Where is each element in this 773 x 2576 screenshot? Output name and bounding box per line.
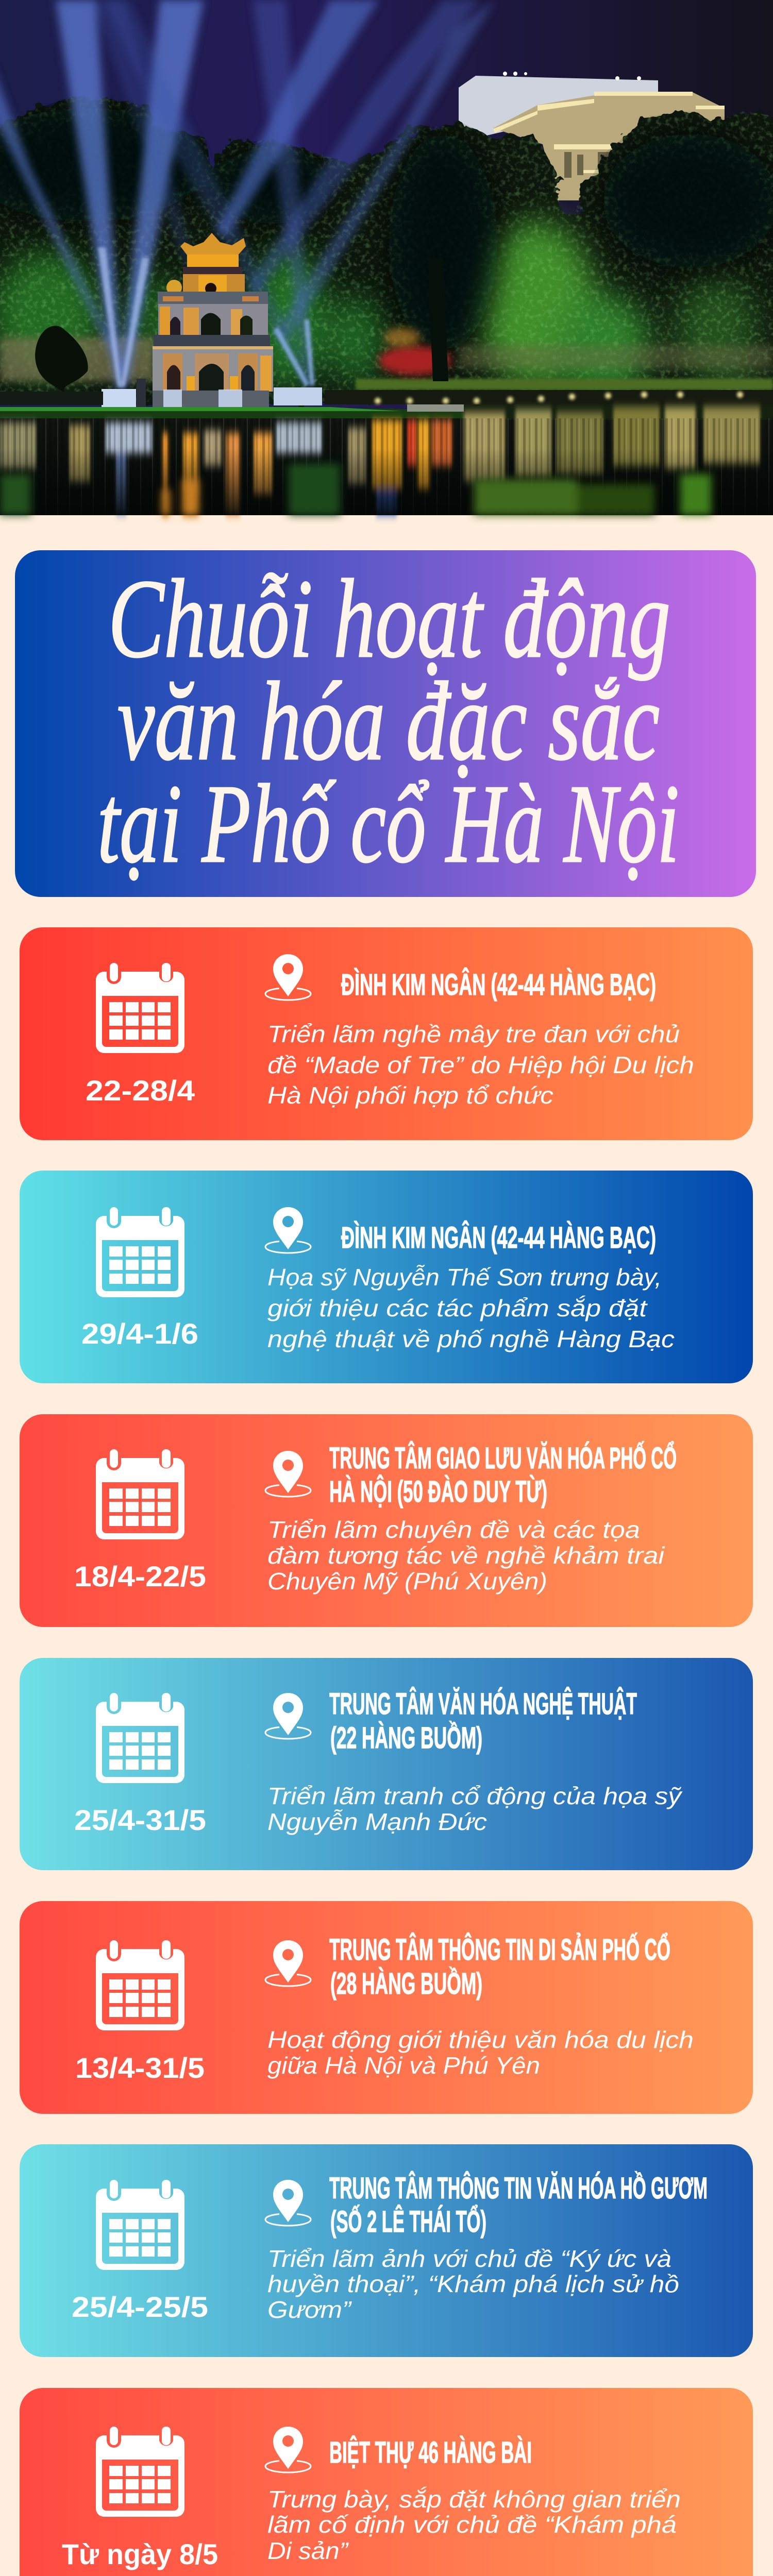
lit foliage glow: [0, 222, 773, 412]
icon: calendar: [96, 963, 184, 1053]
description: Triển lãm nghề mây tre đan với chủ: [267, 1021, 680, 1047]
island shoreline: [0, 404, 468, 421]
description: giữa Hà Nội và Phú Yên: [267, 2052, 540, 2079]
description: Triển lãm tranh cổ động của họa sỹ: [267, 1783, 683, 1809]
date: 25/4-25/5: [72, 2291, 208, 2323]
icon: calendar: [96, 2427, 184, 2517]
description: đàm tương tác về nghề khảm trai: [267, 1542, 665, 1569]
icon: calendar: [96, 1693, 184, 1783]
icon: calendar: [96, 1940, 184, 2030]
venue heading: [329, 1933, 670, 2001]
date: 29/4-1/6: [81, 1317, 198, 1350]
description: [267, 1783, 683, 1835]
description: [267, 2026, 694, 2079]
icon: location pin: [265, 1693, 311, 1739]
description: đề “Made of Tre” do Hiệp hội Du lịch: [267, 1052, 694, 1078]
far bank with lights: [0, 390, 773, 405]
description: [267, 2245, 679, 2323]
description: giới thiệu các tác phẩm sắp đặt: [267, 1295, 648, 1321]
description: [267, 1264, 675, 1352]
description: [267, 2486, 681, 2564]
description: [267, 1021, 694, 1109]
description: Hà Nội phối hợp tổ chức: [267, 1082, 553, 1109]
description: Hoạt động giới thiệu văn hóa du lịch: [267, 2026, 694, 2053]
description: Trưng bày, sắp đặt không gian triển: [267, 2486, 681, 2513]
date: 18/4-22/5: [74, 1560, 206, 1592]
icon: calendar: [96, 1207, 184, 1297]
description: Triển lãm ảnh với chủ đề “Ký ức và: [267, 2245, 671, 2272]
Turtle Tower: [153, 233, 273, 407]
icon: calendar: [96, 2180, 184, 2270]
panel: Trung tâm Thông tin Văn hóa Hồ Gươm, 25/4-25/5: [20, 2144, 753, 2357]
venue heading: (SỐ 2 LÊ THÁI TỔ): [330, 2205, 486, 2239]
tree canopy silhouettes: [0, 98, 773, 402]
description: Gươm”: [267, 2296, 352, 2323]
description: [267, 1516, 665, 1595]
hero photo: Turtle Tower at night: [0, 0, 773, 515]
title: [97, 557, 679, 886]
icon: location pin: [265, 1940, 311, 1986]
venue heading: HÀ NỘI (50 ĐÀO DUY TỪ): [329, 1475, 547, 1509]
description: Triển lãm chuyên đề và các tọa: [267, 1516, 640, 1543]
venue heading: [329, 1442, 677, 1509]
description: Di sản”: [267, 2537, 349, 2564]
venue heading: [329, 1687, 637, 1755]
panel: Biệt thự 46 Hàng Bài, từ ngày 8/5: [20, 2388, 753, 2576]
panel: Đình Kim Ngân, 29/4-1/6: [20, 1171, 753, 1383]
icon: location pin: [265, 2180, 311, 2226]
date: Từ ngày 8/5: [62, 2538, 218, 2570]
description: Chuyên Mỹ (Phú Xuyên): [267, 1568, 547, 1595]
icon: location pin: [265, 2427, 311, 2472]
icon: calendar: [96, 1449, 184, 1539]
leaf texture: [0, 93, 773, 402]
distant plaza and lawn: [0, 258, 773, 392]
panel: Đình Kim Ngân, 22-28/4: [20, 927, 753, 1140]
panel: Trung tâm Văn hóa Nghệ thuật, 25/4-31/5: [20, 1658, 753, 1870]
panel: Trung tâm Giao lưu Văn hóa Phố cổ, 18/4-22/5: [20, 1414, 753, 1627]
description: Nguyễn Mạnh Đức: [267, 1808, 487, 1835]
description: lãm cố định với chủ đề “Khám phá: [267, 2511, 677, 2538]
date: 22-28/4: [86, 1074, 195, 1107]
hotel building on the skyline: [459, 72, 725, 200]
date: 25/4-31/5: [74, 1804, 206, 1836]
venue heading: [329, 2172, 708, 2239]
description: Họa sỹ Nguyễn Thế Sơn trưng bày,: [267, 1264, 662, 1291]
venue heading: (22 HÀNG BUỒM): [330, 1721, 482, 1755]
description: huyền thoại”, “Khám phá lịch sử hồ: [267, 2270, 679, 2297]
panel: title banner: [15, 550, 756, 897]
venue heading: BIỆT THỰ 46 HÀNG BÀI: [329, 2436, 532, 2469]
searchlight beams: [0, 0, 495, 387]
exhibition light boxes: [102, 379, 322, 409]
icon: location pin: [265, 954, 311, 1000]
icon: location pin: [265, 1207, 311, 1253]
venue heading: (28 HÀNG BUỒM): [330, 1967, 482, 2001]
description: nghệ thuật về phố nghề Hàng Bạc: [267, 1326, 675, 1352]
date: 13/4-31/5: [75, 2052, 205, 2084]
panel: Trung tâm Thông tin Di sản Phố cổ, 13/4-31/5: [20, 1901, 753, 2114]
icon: location pin: [265, 1451, 311, 1497]
lake with reflections: [0, 404, 773, 515]
